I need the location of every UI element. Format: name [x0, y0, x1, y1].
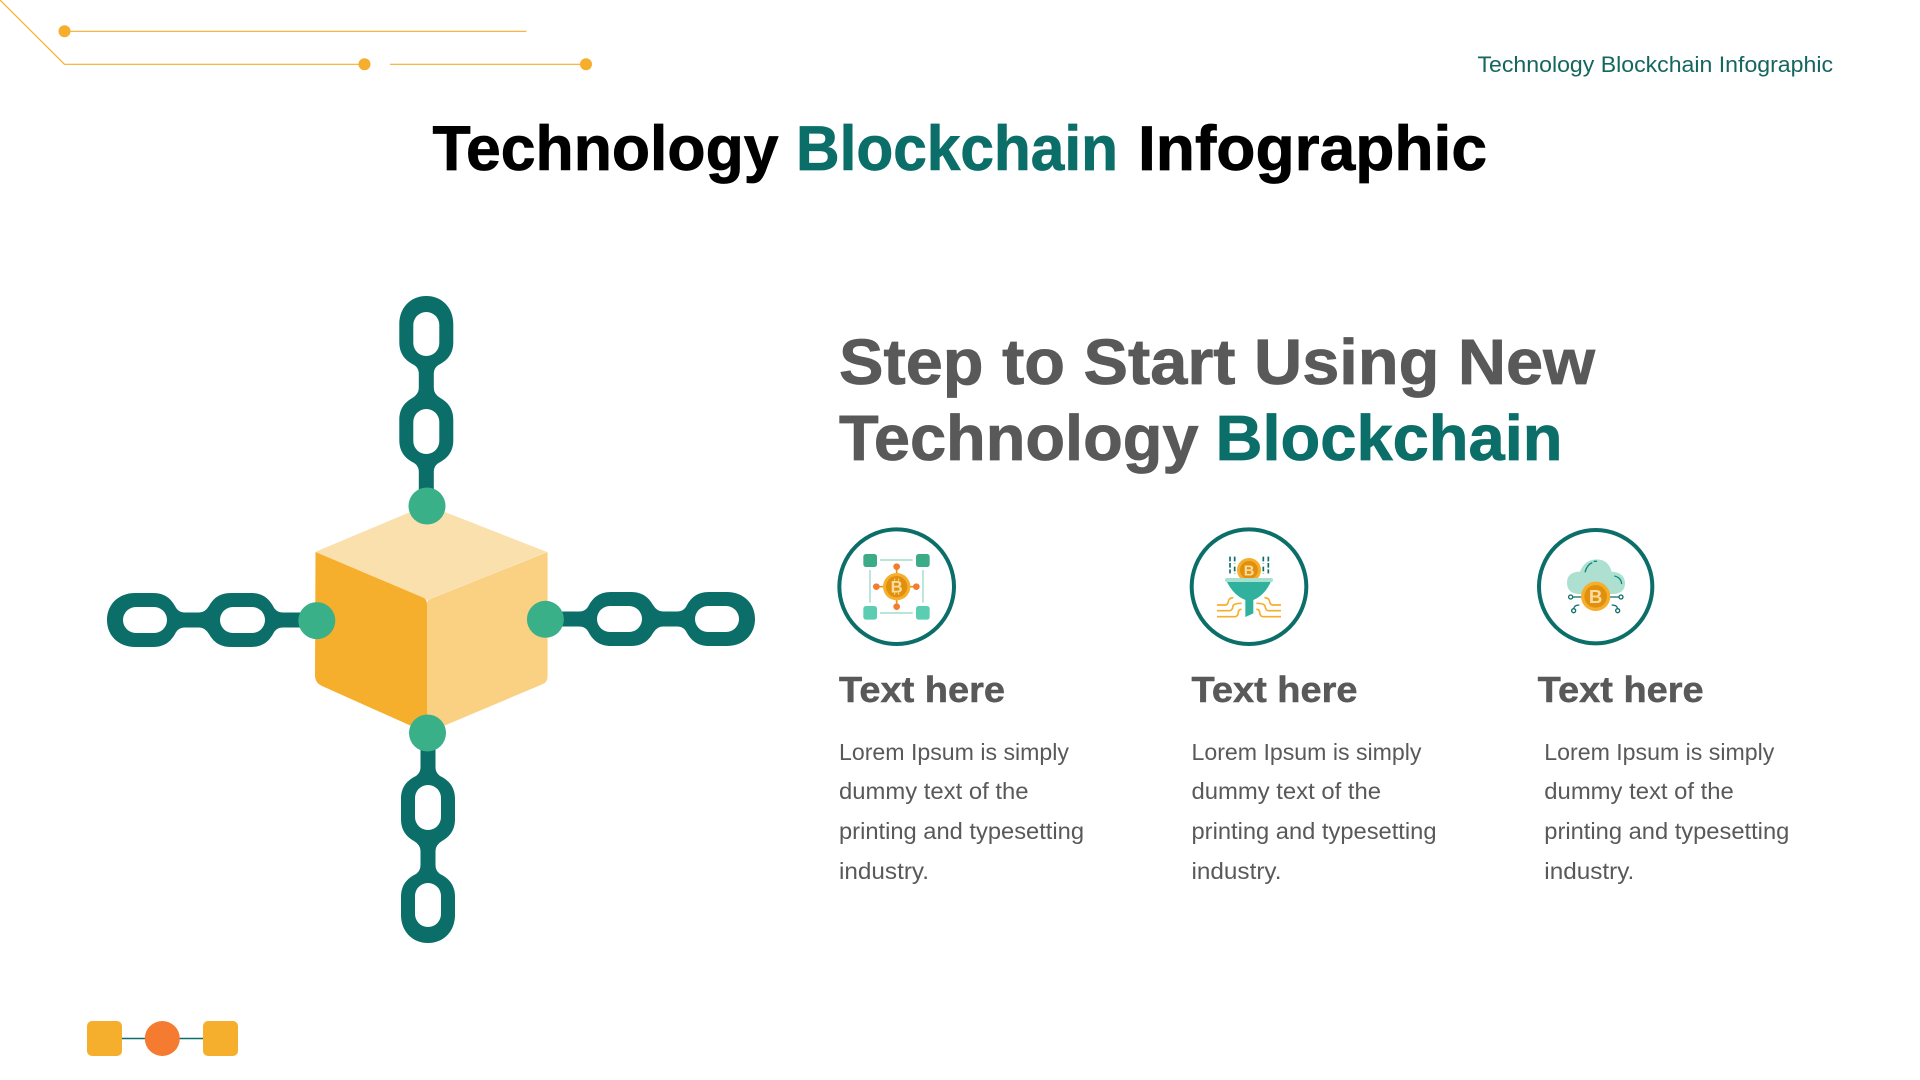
- column 1 text: [839, 669, 1084, 884]
- chain: top: [399, 296, 453, 506]
- column 2 text: dummy text of the: [1192, 778, 1381, 804]
- header label: Technology Blockchain Infographic: [1478, 52, 1833, 77]
- icon: cloud coin: B: [1589, 586, 1602, 607]
- column 1 text: industry.: [839, 858, 929, 884]
- column 3 text: printing and typesetting: [1544, 818, 1789, 844]
- column 2 text: Text here: [1192, 669, 1358, 710]
- column 3 text: [1538, 669, 1789, 884]
- chain: right: [545, 592, 755, 646]
- column 1 text: Lorem Ipsum is simply: [839, 739, 1069, 765]
- column 1 text: Text here: [839, 669, 1005, 710]
- illustration: cube with four chains: [107, 296, 755, 943]
- connector nodes: [298, 488, 564, 752]
- chain: left: [107, 593, 317, 647]
- icon: cloud coin: [1539, 530, 1652, 643]
- footer ornament: [87, 1021, 238, 1056]
- column 3 text: Text here: [1538, 669, 1704, 710]
- title: [432, 114, 1487, 184]
- column 3 text: industry.: [1544, 858, 1634, 884]
- section heading: Step to Start Using New: [839, 326, 1595, 398]
- title: Technology: [432, 114, 778, 184]
- chain: bottom: [401, 733, 455, 943]
- cube: [315, 505, 548, 733]
- column 1 text: printing and typesetting: [839, 818, 1084, 844]
- decorative circuit lines top left: [0, 0, 592, 70]
- section heading: Technology: [839, 402, 1199, 474]
- column 1 text: dummy text of the: [839, 778, 1028, 804]
- icon: funnel coin: [1192, 529, 1306, 644]
- title: Blockchain: [796, 114, 1118, 184]
- section heading: Blockchain: [1216, 402, 1562, 474]
- column 2 text: printing and typesetting: [1192, 818, 1436, 844]
- column 3 text: dummy text of the: [1544, 778, 1734, 804]
- column 2 text: [1192, 669, 1436, 884]
- section heading: [839, 326, 1595, 474]
- icon: funnel coin: B: [1244, 563, 1254, 579]
- title: Infographic: [1138, 114, 1487, 184]
- column 2 text: industry.: [1192, 858, 1282, 884]
- column 3 text: Lorem Ipsum is simply: [1544, 739, 1775, 765]
- icon: network coin: [839, 529, 954, 644]
- column 2 text: Lorem Ipsum is simply: [1192, 739, 1422, 765]
- icon: network coin: B: [891, 578, 903, 597]
